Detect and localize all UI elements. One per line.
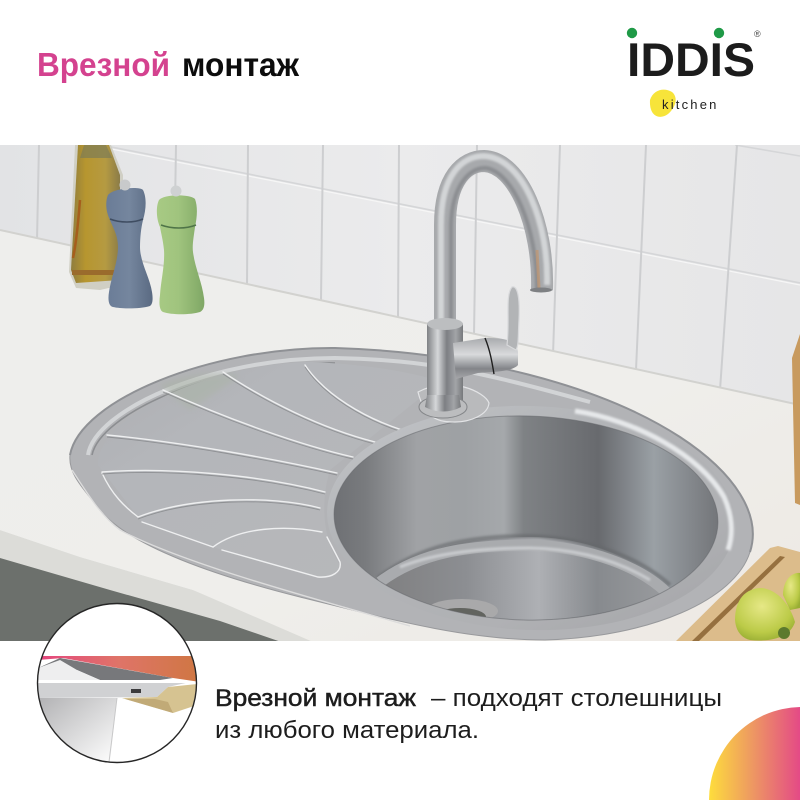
corner gradient circle: [709, 707, 800, 800]
drainboard: [162, 362, 335, 398]
logo: IDDIS kitchen: IDDIS: [627, 33, 755, 86]
bowl: [334, 416, 718, 620]
sink top surface: [38, 658, 173, 680]
description text: из любого материала.: [215, 717, 479, 744]
spout: [441, 156, 547, 328]
faucet: [418, 156, 552, 422]
drainboard rim highlight: [88, 358, 590, 455]
steel knob: [120, 180, 130, 190]
countertop: [0, 230, 800, 645]
title: Врезной: [37, 46, 170, 83]
handle body: [453, 338, 518, 379]
tiled wall: [0, 145, 800, 402]
countertop wood surface: [38, 656, 200, 682]
base foot: [419, 396, 467, 418]
logo: IDDIS kitchen: ®: [754, 29, 761, 39]
sink underside: [38, 698, 117, 762]
wood block at right edge: [792, 334, 800, 505]
olive oil bottle: [69, 145, 123, 290]
title: монтаж: [182, 46, 300, 83]
base column: [427, 319, 463, 400]
bowl outer ring: [330, 407, 712, 622]
title: [37, 46, 300, 83]
sink: [70, 348, 753, 640]
chipboard edge: [122, 684, 197, 713]
outer rim: [70, 348, 753, 640]
bowl floor: [386, 537, 656, 620]
drain: [432, 599, 498, 618]
counter front edge: [0, 530, 320, 645]
description text: – подходят столешницы: [431, 685, 722, 712]
floor curved highlight: [380, 545, 666, 592]
description text: [215, 685, 722, 744]
sink flange: [38, 682, 190, 698]
cutting board: [672, 546, 800, 645]
deck plate: [418, 385, 489, 422]
steel knob: [170, 186, 182, 196]
lever: [507, 287, 519, 350]
blue pepper mill: [106, 180, 153, 308]
peppers: [735, 573, 800, 640]
logo: IDDIS kitchen: [627, 28, 761, 117]
drainboard ribs: [102, 365, 402, 577]
photo: kitchen sink: [0, 125, 800, 645]
description text: Врезной монтаж: [215, 685, 416, 712]
green pepper mill: [157, 186, 204, 314]
inset circle: countertop cross-section: [38, 604, 200, 762]
logo: IDDIS kitchen: kitchen: [662, 97, 719, 112]
